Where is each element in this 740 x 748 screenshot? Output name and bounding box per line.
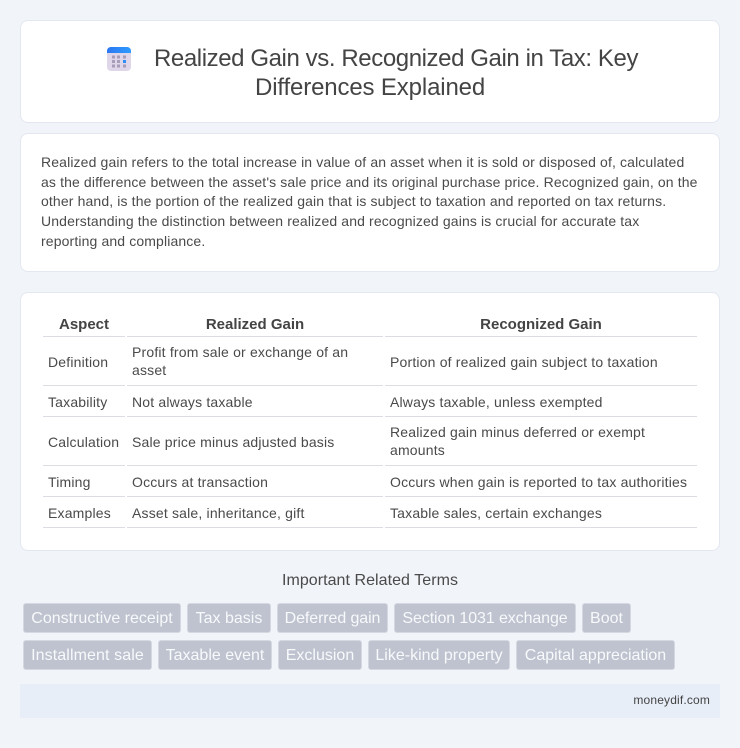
tag list: related terms: Installment sale: [31, 647, 144, 664]
row: definition: [48, 344, 658, 378]
tag list: related terms: Capital appreciation: [525, 647, 666, 664]
tag list: related terms: [23, 603, 675, 670]
row: timing: [48, 474, 687, 490]
footer source: moneydif.com: [633, 693, 710, 707]
row: examples: Asset sale, inheritance, gift: [132, 505, 305, 521]
heading: related terms: Important Related Terms: [282, 572, 458, 589]
row: calculation: Calculation: [48, 434, 119, 450]
row: definition: Profit from sale or exchange of an: [132, 344, 348, 360]
row: definition: asset: [132, 362, 166, 378]
row: calculation: [48, 424, 645, 458]
tag list: related terms: Deferred gain: [285, 610, 380, 627]
intro text: other hand, is the portion of the realized gain that is subject to taxation and reported on tax returns.: [41, 193, 666, 209]
row: timing: Timing: [48, 474, 91, 490]
footer bar: [20, 684, 720, 718]
intro text: Realized gain refers to the total increase in value of an asset when it is sold or disposed of, calculated: [41, 154, 684, 170]
row: definition: Portion of realized gain subject to taxation: [390, 354, 658, 370]
row: taxability: Always taxable, unless exempted: [390, 394, 603, 410]
intro text: Understanding the distinction between realized and recognized gains is crucial for accurate tax: [41, 213, 639, 229]
row: timing: Occurs when gain is reported to tax authorities: [390, 474, 687, 490]
row: examples: Taxable sales, certain exchanges: [390, 505, 602, 521]
title: [154, 45, 638, 101]
table header: Recognized Gain: [480, 316, 602, 333]
row: calculation: Sale price minus adjusted basis: [132, 434, 334, 450]
table header: Realized Gain: [206, 316, 304, 333]
intro text: reporting and compliance.: [41, 233, 205, 249]
row: definition: Definition: [48, 354, 108, 370]
row: examples: [48, 505, 602, 521]
tag list: related terms: Section 1031 exchange: [402, 610, 568, 627]
panel: intro paragraph: [20, 133, 720, 272]
table header: [59, 316, 602, 333]
table header: Aspect: [59, 316, 109, 333]
tag list: related terms: Tax basis: [196, 610, 262, 627]
intro text: as the difference between the asset's sale price and its original purchase price. Recognized gain, on the: [41, 174, 698, 190]
panel: title card: [20, 20, 720, 123]
row: calculation: Realized gain minus deferred or exempt: [390, 424, 645, 440]
row: taxability: Not always taxable: [132, 394, 253, 410]
intro text: [41, 154, 698, 249]
panel: comparison table: [20, 292, 720, 551]
icon: calendar: [107, 47, 131, 71]
title: Differences Explained: [255, 74, 485, 101]
row: calculation: amounts: [390, 442, 445, 458]
row: examples: Examples: [48, 505, 111, 521]
tag list: related terms: Exclusion: [286, 647, 354, 664]
tag list: related terms: Like-kind property: [375, 647, 503, 664]
tag list: related terms: Taxable event: [166, 647, 264, 664]
row: taxability: [48, 394, 603, 410]
title: Realized Gain vs. Recognized Gain in Tax: Key: [154, 45, 638, 72]
row: taxability: Taxability: [48, 394, 107, 410]
row: timing: Occurs at transaction: [132, 474, 268, 490]
tag list: related terms: Constructive receipt: [31, 610, 173, 627]
tag list: related terms: Boot: [590, 610, 623, 627]
